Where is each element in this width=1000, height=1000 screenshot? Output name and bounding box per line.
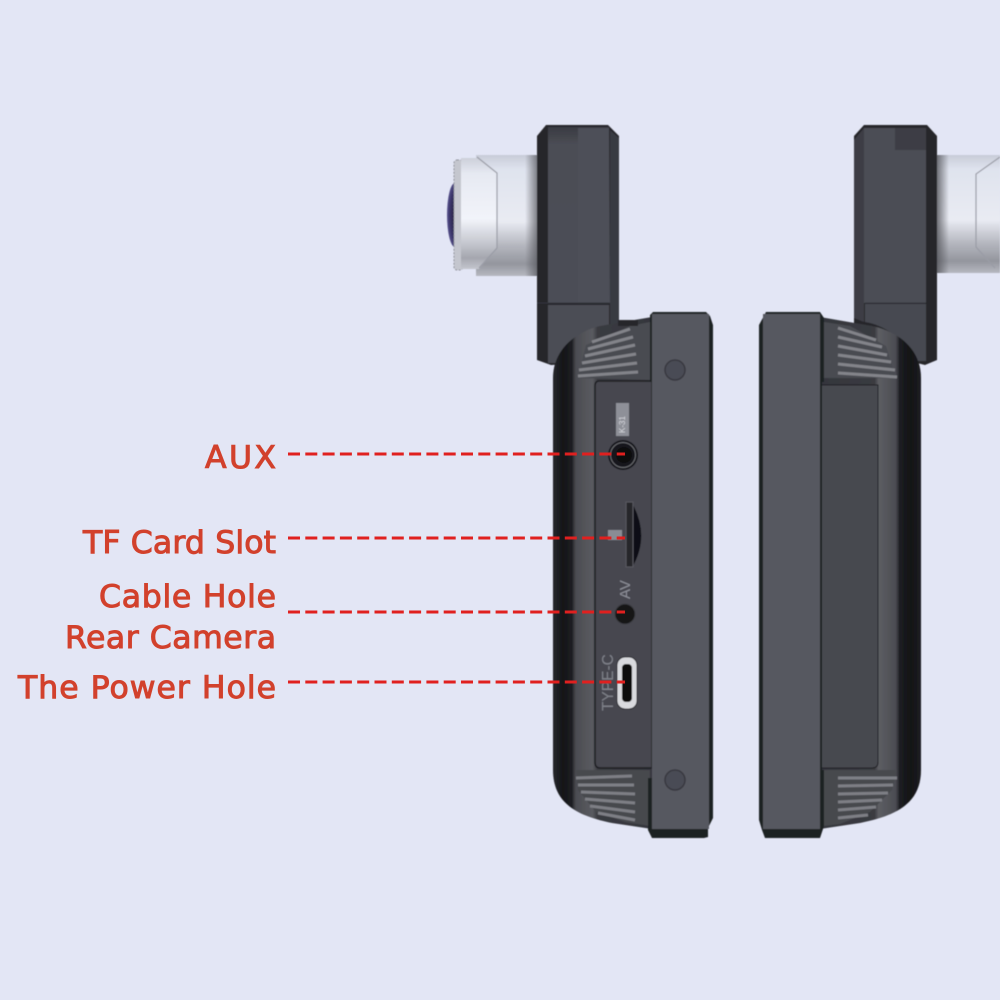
left camera module: [537, 125, 619, 365]
AUX marking sticker: [616, 403, 629, 436]
left main body shell: [553, 317, 652, 829]
right lens assembly: [937, 155, 1000, 273]
AV label: AV: [617, 580, 634, 599]
left top rib area: [578, 322, 650, 380]
USB-C port: [617, 657, 637, 709]
left lens glass: [447, 183, 463, 247]
AUX jack: [608, 440, 638, 470]
left device: side with ports: [447, 125, 713, 838]
left front plate: [648, 312, 713, 838]
AUX leader line: [288, 452, 625, 456]
left bottom ribs: [576, 776, 635, 820]
callout: cable hole rear camera: [65, 579, 625, 656]
AUX marking sticker: K-31: [618, 416, 627, 433]
TF card slot leader line: [288, 536, 625, 540]
TF card slot: [626, 502, 641, 567]
right top ribs: [838, 328, 897, 377]
left lower screw: [665, 770, 685, 790]
TYPE-C label: TYPE-C: [600, 654, 617, 711]
AV hole: [615, 604, 635, 624]
right camera module: [854, 125, 937, 365]
left top vent slots: [618, 320, 638, 326]
cable hole label line 1: Cable Hole: [99, 579, 276, 615]
left port panel: [595, 381, 652, 768]
power hole leader line: [288, 680, 625, 684]
rear camera label line 2: Rear Camera: [65, 620, 276, 656]
left silver housing rear: [476, 155, 537, 276]
left bottom rib area: [576, 770, 650, 826]
cable hole leader line: [288, 610, 625, 614]
right lens contact shadow: [937, 155, 949, 273]
right main body shell: [820, 317, 921, 829]
right back panel: [820, 385, 878, 768]
left lens assembly: [447, 155, 537, 276]
TF card slot label: TF Card Slot: [82, 525, 276, 561]
left silver housing front: [461, 158, 497, 269]
left lens contact shadow: [525, 155, 537, 276]
left lens knurled ring: [454, 160, 463, 270]
right front plate: [759, 312, 824, 838]
left top ribs: [578, 329, 638, 376]
right top rib area: [824, 322, 896, 378]
right device: plain side: [759, 125, 1000, 838]
right silver housing: [937, 155, 1000, 273]
AUX label: AUX: [205, 440, 276, 476]
right bottom rib area: [824, 770, 897, 826]
left upper screw: [665, 360, 685, 380]
right bottom ribs: [838, 778, 897, 818]
TF marking: [608, 530, 622, 540]
power hole label: The Power Hole: [17, 670, 276, 706]
